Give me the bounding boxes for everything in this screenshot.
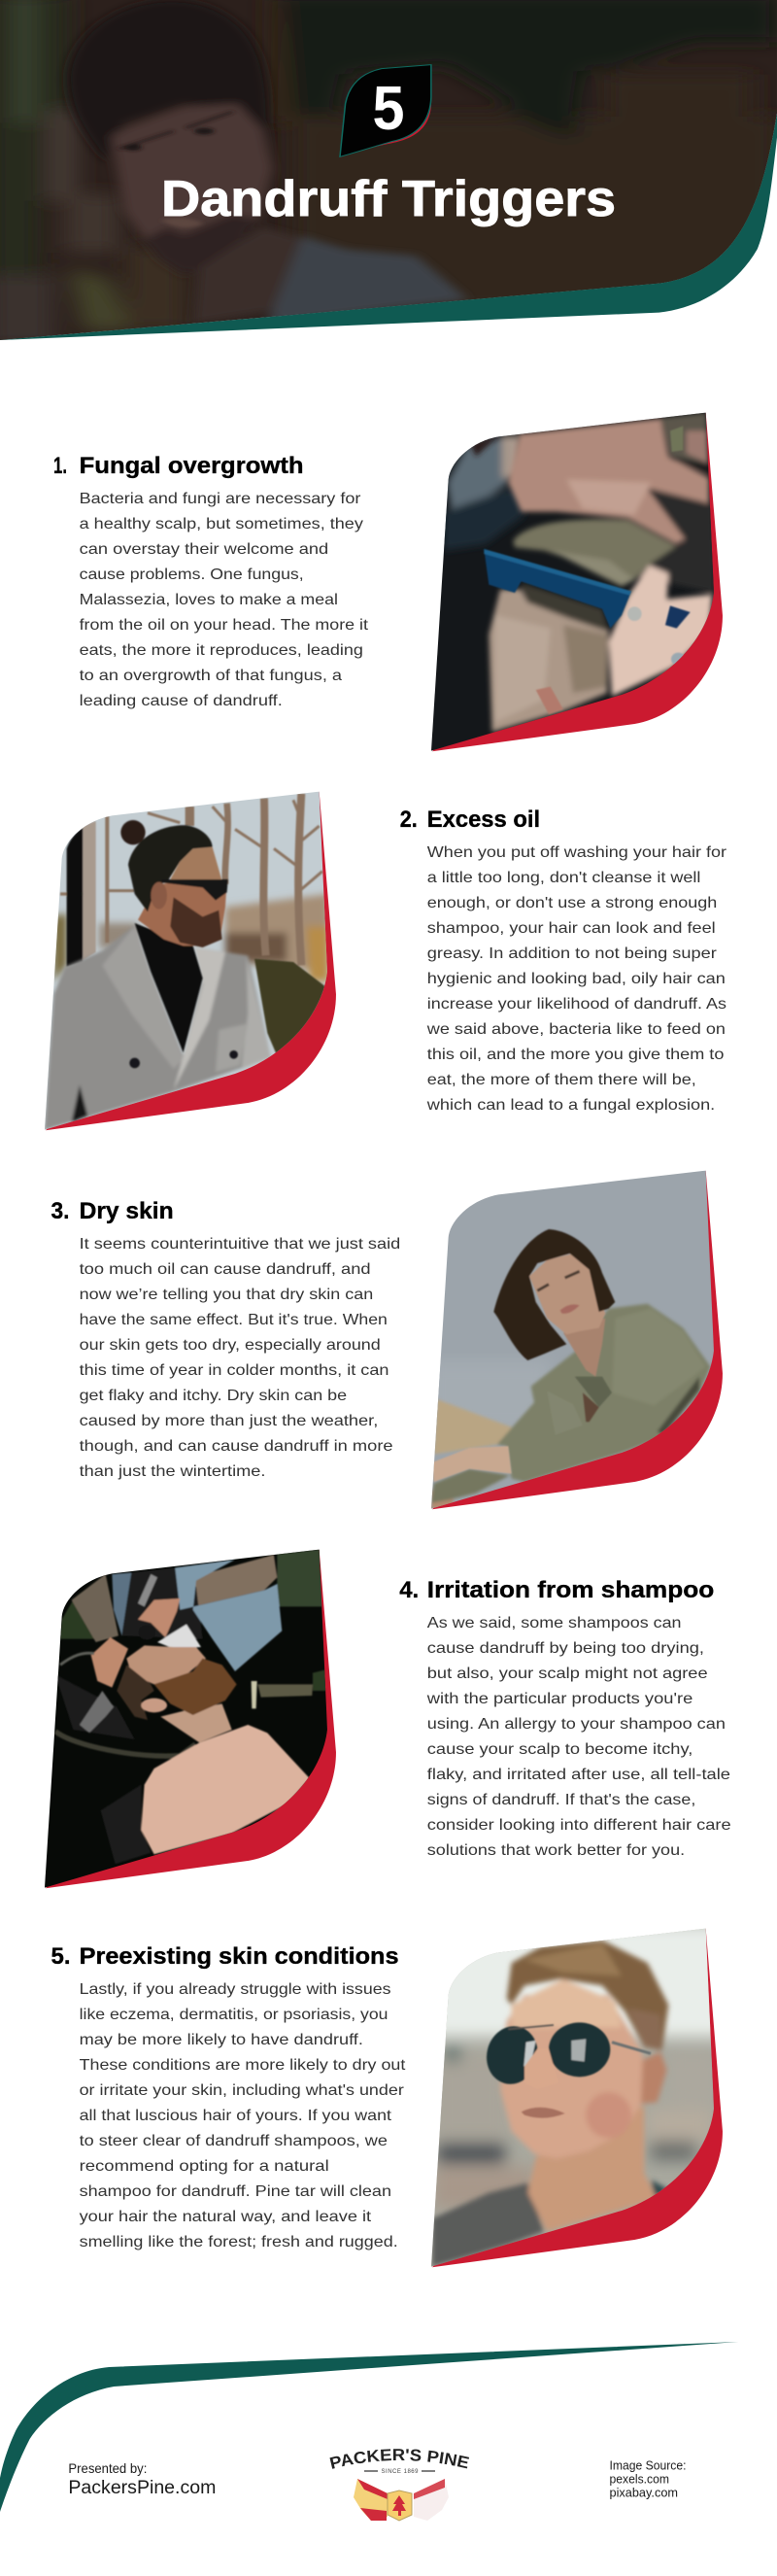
image source (610, 2458, 686, 2500)
heading 5: 5. (51, 1943, 70, 1970)
header banner (0, 0, 777, 347)
body text 3: caused by more than just the weather, (80, 1413, 378, 1429)
panel: trigger 5 preexisting skin conditions (51, 1924, 728, 2274)
heading 5: Preexisting skin conditions (80, 1943, 399, 1970)
presented by: PackersPine.com (68, 2478, 216, 2498)
badge: number 5: 5 (373, 73, 404, 143)
heading 1: 1. (53, 453, 67, 479)
body text 4: using. An allergy to your shampoo can (427, 1716, 726, 1733)
body text 2: greasy. In addition to not being super (427, 945, 718, 962)
body text 2: eat, the more of them there will be, (427, 1072, 696, 1088)
body text 5: recommend opting for a natural (80, 2158, 329, 2175)
heading 4: Irritation from shampoo (427, 1577, 714, 1603)
panel: trigger 2 excess oil (41, 787, 727, 1137)
body text 4: cause your scalp to become itchy, (427, 1741, 693, 1758)
body text 1: Malassezia, loves to make a meal (80, 592, 338, 608)
panel: trigger 3 dry skin (51, 1166, 728, 1516)
body text 5: all that luscious hair of yours. If you want (80, 2108, 392, 2124)
image source: pexels.com (610, 2472, 669, 2487)
body text 5: shampoo for dandruff. Pine tar will clean (80, 2183, 391, 2200)
header photo (0, 0, 777, 347)
heading 2: Excess oil (427, 807, 540, 833)
body text 3: now we’re telling you that dry skin can (80, 1287, 373, 1303)
heading 4: 4. (399, 1577, 419, 1603)
body text 2 (426, 844, 727, 1114)
body text 2: a little too long, don't cleanse it well (427, 870, 700, 886)
photo 2: man in grey blazer with sunglasses (41, 787, 342, 1137)
presented by (68, 2460, 216, 2498)
heading 3: Dry skin (80, 1198, 174, 1224)
body text 4: solutions that work better for you. (427, 1842, 685, 1859)
image source: Image Source: (610, 2458, 686, 2473)
body text 3 (80, 1236, 400, 1480)
body text 4: cause dandruff by being too drying, (427, 1640, 704, 1657)
body text 1: a healthy scalp, but sometimes, they (80, 516, 363, 532)
logo: Packer's Pine: PACKER'S PINE (330, 2449, 469, 2469)
body text 1: from the oil on your head. The more it (80, 617, 369, 634)
body text 1: eats, the more it reproduces, leading (80, 642, 363, 659)
body text 3: our skin gets too dry, especially around (80, 1337, 381, 1354)
body text 3: have the same effect. But it's true. When (80, 1312, 388, 1328)
body text 1 (80, 491, 369, 709)
panel: trigger 4 irritation from shampoo (41, 1545, 731, 1895)
body text 3: too much oil can cause dandruff, and (80, 1261, 371, 1278)
body text 4: consider looking into different hair care (427, 1817, 731, 1834)
body text 2: hygienic and looking bad, oily hair can (427, 971, 726, 987)
body text 5 (80, 1981, 406, 2250)
body text 5: your hair the natural way, and leave it (80, 2209, 372, 2225)
body text 4 (426, 1615, 731, 1859)
body text 4: with the particular products you're (426, 1691, 693, 1707)
photo 3: long-haired man in olive jacket (427, 1166, 728, 1516)
body text 2: enough, or don't use a strong enough (427, 895, 717, 911)
body text 1: cause problems. One fungus, (80, 567, 304, 583)
body text 5: or irritate your skin, including what's under (80, 2082, 405, 2099)
body text 2: this oil, and the more you give them to (427, 1047, 725, 1063)
image source: pixabay.com (610, 2486, 678, 2500)
body text 3: It seems counterintuitive that we just said (80, 1236, 400, 1253)
heading 3: 3. (51, 1198, 70, 1224)
body text 4: signs of dandruff. If that's the case, (427, 1792, 695, 1808)
body text 3: though, and can cause dandruff in more (80, 1438, 393, 1455)
photo 5: young man in aviator sunglasses (427, 1924, 728, 2274)
photo 1: barber combing hair (427, 408, 728, 758)
body text 2: we said above, bacteria like to feed on (426, 1021, 726, 1038)
body text 1: leading cause of dandruff. (80, 693, 283, 709)
heading 2: 2. (400, 807, 418, 833)
body text 5: Lastly, if you already struggle with issues (80, 1981, 390, 1998)
body text 5: to steer clear of dandruff shampoos, we (80, 2133, 388, 2149)
teal swoosh (0, 114, 777, 340)
body text 5: like eczema, dermatitis, or psoriasis, you (80, 2007, 388, 2023)
body text 3: than just the wintertime. (80, 1463, 265, 1480)
presented by: Presented by: (68, 2460, 147, 2476)
body text 3: get flaky and itchy. Dry skin can be (80, 1388, 347, 1404)
heading 1: Fungal overgrowth (80, 453, 304, 479)
logo: Packer's Pine (330, 2449, 469, 2521)
body text 1: can overstay their welcome and (80, 541, 328, 558)
badge: number 5 (340, 65, 431, 156)
body text 2: which can lead to a fungal explosion. (426, 1097, 715, 1114)
photo 4: man having hair washed at salon (41, 1545, 342, 1895)
panel: trigger 1 fungal overgrowth (53, 408, 728, 758)
logo: Packer's Pine: SINCE 1869 (381, 2469, 419, 2475)
icon: winged crest (354, 2479, 449, 2521)
body text 2: When you put off washing your hair for (427, 844, 727, 861)
body text 1: to an overgrowth of that fungus, a (80, 668, 342, 684)
footer swoosh (0, 2342, 738, 2512)
body text 3: this time of year in colder months, it can (80, 1362, 388, 1379)
body text 2: shampoo, your hair can look and feel (427, 920, 716, 937)
body text 4: but also, your scalp might not agree (427, 1666, 708, 1682)
title: Dandruff Triggers (161, 171, 616, 227)
body text 1: Bacteria and fungi are necessary for (80, 491, 361, 507)
body text 4: flaky, and irritated after use, all tell-tale (427, 1767, 730, 1783)
body text 4: As we said, some shampoos can (427, 1615, 682, 1631)
body text 2: increase your likelihood of dandruff. As (427, 996, 726, 1013)
body text 5: These conditions are more likely to dry out (80, 2057, 406, 2074)
body text 5: smelling like the forest; fresh and rugged. (80, 2234, 398, 2250)
body text 5: may be more likely to have dandruff. (80, 2032, 363, 2048)
